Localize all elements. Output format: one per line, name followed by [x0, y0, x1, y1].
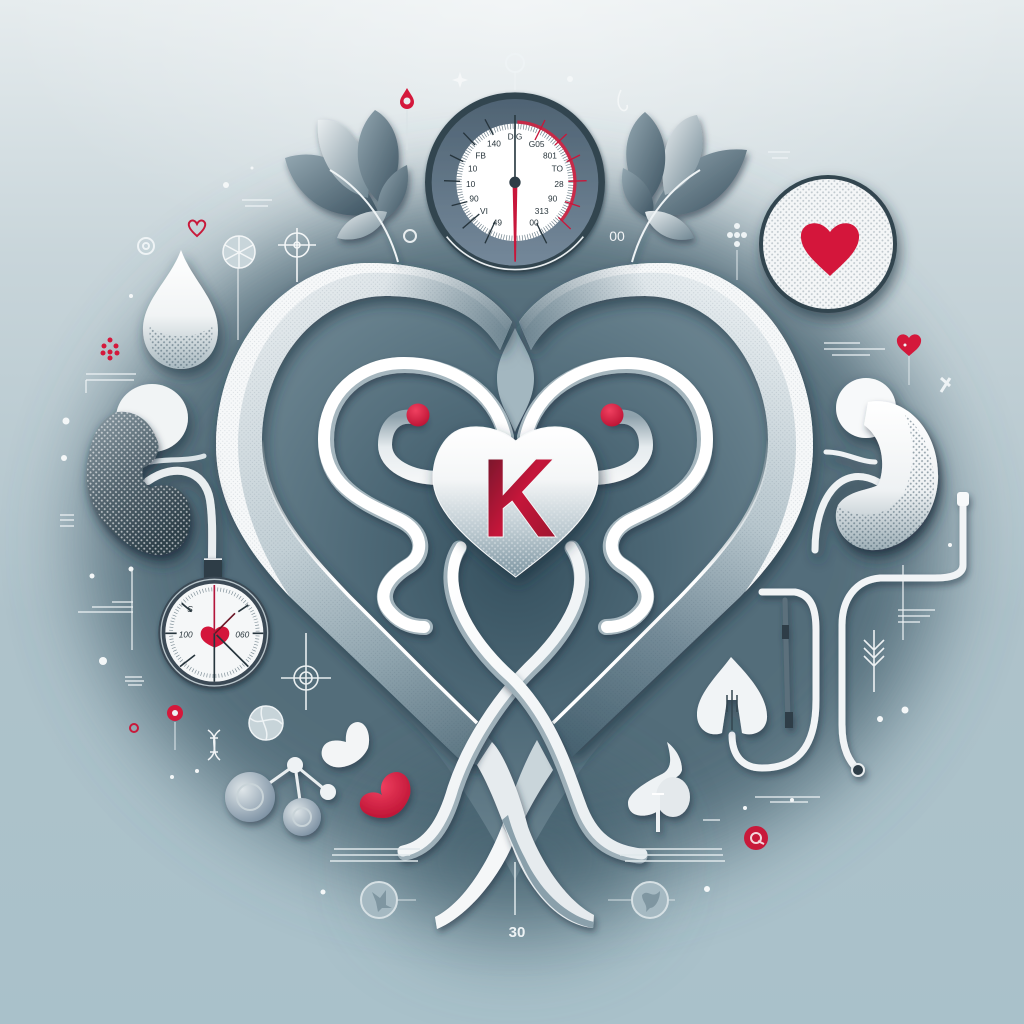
dial numbers: 10	[468, 164, 478, 174]
icon: ring small left	[138, 238, 154, 254]
dial numbers: 140	[487, 139, 501, 149]
tiny dots and line marks	[60, 76, 952, 894]
tube: lower right strand	[403, 547, 582, 853]
dial numbers: 313	[535, 206, 549, 216]
dial numbers: 00	[529, 218, 539, 228]
kidney cap	[116, 384, 188, 452]
ribbon: right lobe	[519, 263, 813, 757]
kidney body	[836, 401, 938, 551]
red dots	[406, 404, 624, 426]
left S tube	[324, 363, 506, 627]
left leaves	[285, 110, 408, 262]
right curl	[591, 417, 646, 478]
dial numbers: 10	[466, 179, 476, 189]
right S tube	[525, 363, 707, 627]
dial numbers: 49	[493, 218, 502, 228]
left curl	[385, 417, 440, 478]
long tube	[842, 498, 963, 770]
dial numbers: 90	[469, 194, 479, 204]
letter K: K	[481, 435, 557, 561]
icon: crosshair top	[278, 228, 316, 282]
dial numbers: FB	[475, 151, 486, 161]
right kidney	[815, 378, 938, 551]
circle badge with heart	[759, 175, 897, 313]
left kidney	[87, 384, 212, 560]
stethoscope tubes	[324, 363, 707, 627]
icon: red pin top	[400, 88, 414, 150]
icon: top ring	[506, 54, 524, 90]
icon: crosshair lower	[281, 633, 331, 710]
icon: bird left	[361, 882, 416, 918]
ribbon: right tail	[435, 740, 553, 929]
red heart center	[201, 626, 229, 648]
icon: mesh globe	[223, 236, 255, 340]
dial numbers: VI	[480, 206, 488, 216]
kidney tube	[146, 456, 212, 560]
icon: ring near leaf	[404, 230, 416, 242]
icon: red pin left	[167, 705, 183, 750]
icon: red outline heart	[189, 220, 205, 236]
kidney cap	[836, 378, 896, 438]
small gauge: 100	[179, 629, 193, 639]
label 00: 00	[609, 228, 625, 244]
dial numbers: TO	[552, 164, 564, 174]
needles	[512, 115, 517, 182]
kidney ureter	[815, 452, 878, 550]
leaf-shaped organ	[697, 657, 767, 734]
small gauge	[158, 558, 270, 689]
tube: lower left strand	[451, 547, 642, 856]
molecule spheres	[225, 757, 336, 836]
large heart ribbon	[216, 263, 813, 929]
dial face	[456, 124, 574, 241]
dial numbers: DIG	[508, 132, 522, 142]
kidney body	[87, 412, 190, 555]
icon: red heart pin right	[897, 334, 921, 385]
red small heart	[360, 772, 410, 818]
icon: chevrons	[864, 630, 884, 692]
heart interior shading	[225, 269, 805, 880]
horizontal base lines	[330, 849, 725, 915]
white bean	[322, 722, 369, 767]
icon: sparkle	[452, 72, 468, 88]
right leaves	[622, 112, 747, 262]
icon: red dots left	[100, 338, 120, 360]
icon: small butterfly	[941, 378, 950, 392]
icon: small red ring	[130, 724, 138, 732]
icon: bird right	[608, 882, 675, 918]
dial numbers	[466, 132, 564, 228]
icon: dots diamond	[727, 223, 747, 280]
central K heart	[433, 427, 598, 577]
lower organ icon	[628, 742, 690, 832]
dial numbers: 28	[554, 179, 564, 189]
dial numbers: G05	[529, 139, 545, 149]
dial numbers: 801	[543, 151, 557, 161]
chest piece	[852, 764, 864, 776]
icon: hook	[618, 90, 627, 111]
main gauge	[425, 92, 605, 272]
dial numbers: 90	[548, 194, 558, 204]
small gauge: S	[187, 604, 193, 614]
ribbon: left tail	[477, 742, 594, 928]
second tube	[732, 592, 816, 768]
water droplet	[143, 250, 218, 369]
center tear shape	[497, 328, 534, 432]
icon: dna	[208, 730, 220, 760]
ribbon: left lobe	[216, 263, 512, 765]
number 30: 30	[509, 924, 525, 941]
icon: red heart	[801, 223, 859, 276]
small gauge: 060	[235, 629, 250, 639]
icon: globe lower	[249, 706, 283, 740]
small decorative icons	[100, 54, 950, 918]
icon: red target	[744, 826, 768, 850]
right stethoscope	[732, 492, 969, 776]
